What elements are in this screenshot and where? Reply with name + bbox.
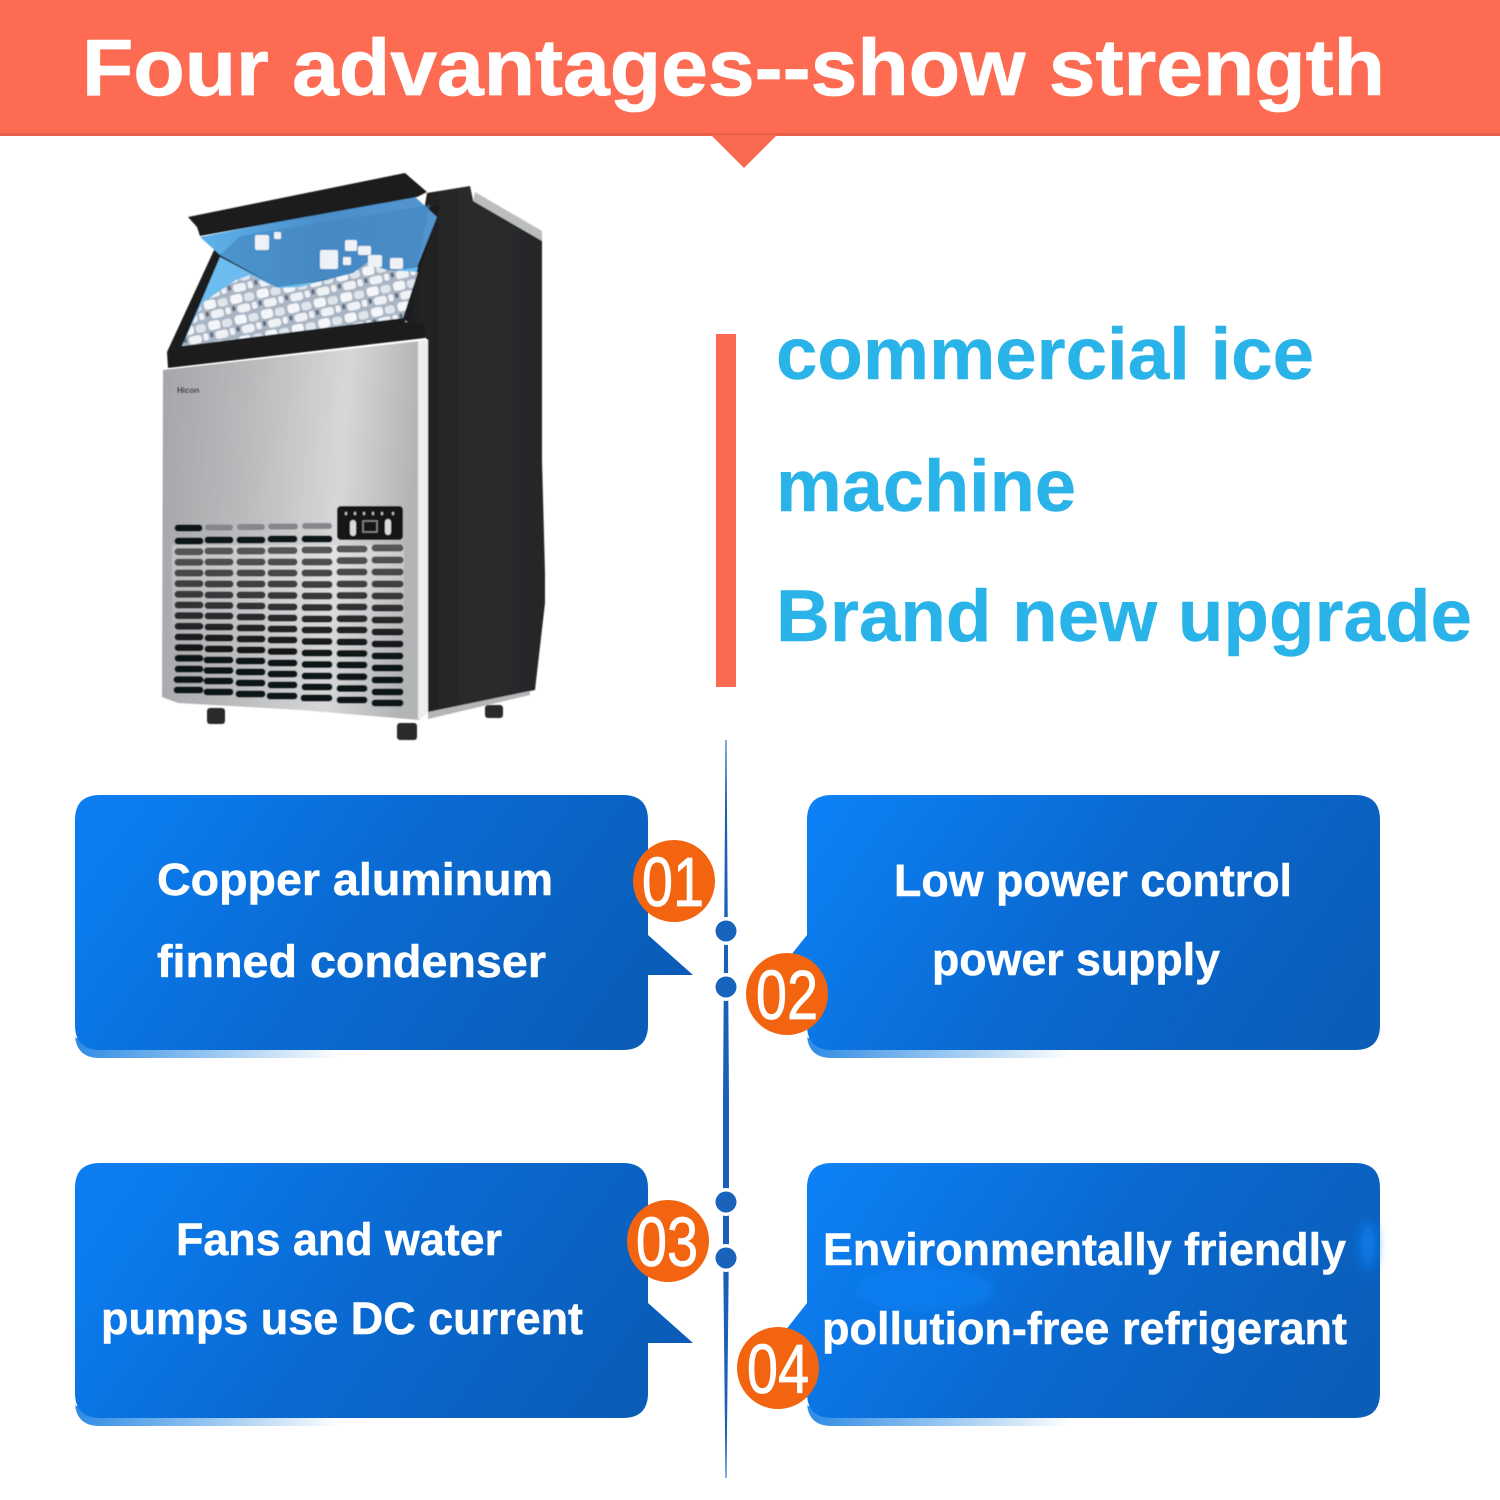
badge 02: 02 <box>756 957 818 1034</box>
panel 02 text: Low power control <box>894 855 1292 906</box>
machine feet <box>207 705 503 740</box>
badge 03: 03 <box>636 1204 698 1281</box>
title: Four advantages--show strength <box>82 23 1385 112</box>
accent bar <box>716 334 736 687</box>
panel 03: fans and water pumps use DC current <box>75 1163 709 1426</box>
panel 03 text: pumps use DC current <box>101 1293 583 1344</box>
machine opening frame <box>167 205 440 368</box>
header banner <box>0 0 1500 168</box>
slot reflection <box>172 545 404 655</box>
subtitle text block <box>776 314 1472 657</box>
panel 04 text: Environmentally friendly <box>823 1224 1346 1275</box>
panel 04 text: pollution-free refrigerant <box>822 1303 1347 1354</box>
lid bar <box>188 173 427 236</box>
panel 04: environmentally friendly pollution-free refrigerant <box>737 1163 1380 1426</box>
brand mark: Hicon <box>177 386 199 395</box>
silver edge strip <box>418 340 428 720</box>
subtitle line 1: commercial ice <box>776 314 1314 395</box>
panel 01: copper aluminum finned condenser <box>75 795 715 1058</box>
panel 01 text <box>157 854 553 987</box>
subtitle line 2: machine <box>776 446 1076 527</box>
control panel <box>337 506 403 540</box>
panel 04 text <box>822 1224 1347 1354</box>
panel 01 text: finned condenser <box>157 936 546 987</box>
panel 02 text: power supply <box>932 934 1220 985</box>
badge 01: 01 <box>642 844 704 921</box>
panel 01 text: Copper aluminum <box>157 854 553 905</box>
machine black side panel <box>405 186 545 713</box>
badge 04: 04 <box>747 1331 809 1408</box>
bin interior <box>182 257 418 346</box>
ventilation slots <box>177 528 400 703</box>
product image: ice machine <box>162 173 545 740</box>
silver front panel <box>162 341 420 720</box>
panel 03 text <box>101 1214 583 1344</box>
panel 02 text <box>894 855 1292 985</box>
loose ice cubes <box>255 232 403 269</box>
central timeline <box>712 740 740 1478</box>
top vent row <box>178 526 329 528</box>
panel 02: low power control power supply <box>746 795 1380 1058</box>
machine silver top strip <box>473 192 542 241</box>
pile of ice cubes <box>182 263 418 346</box>
open lid interior <box>200 195 437 287</box>
panel 03 text: Fans and water <box>176 1214 502 1265</box>
subtitle line 3: Brand new upgrade <box>776 576 1472 657</box>
